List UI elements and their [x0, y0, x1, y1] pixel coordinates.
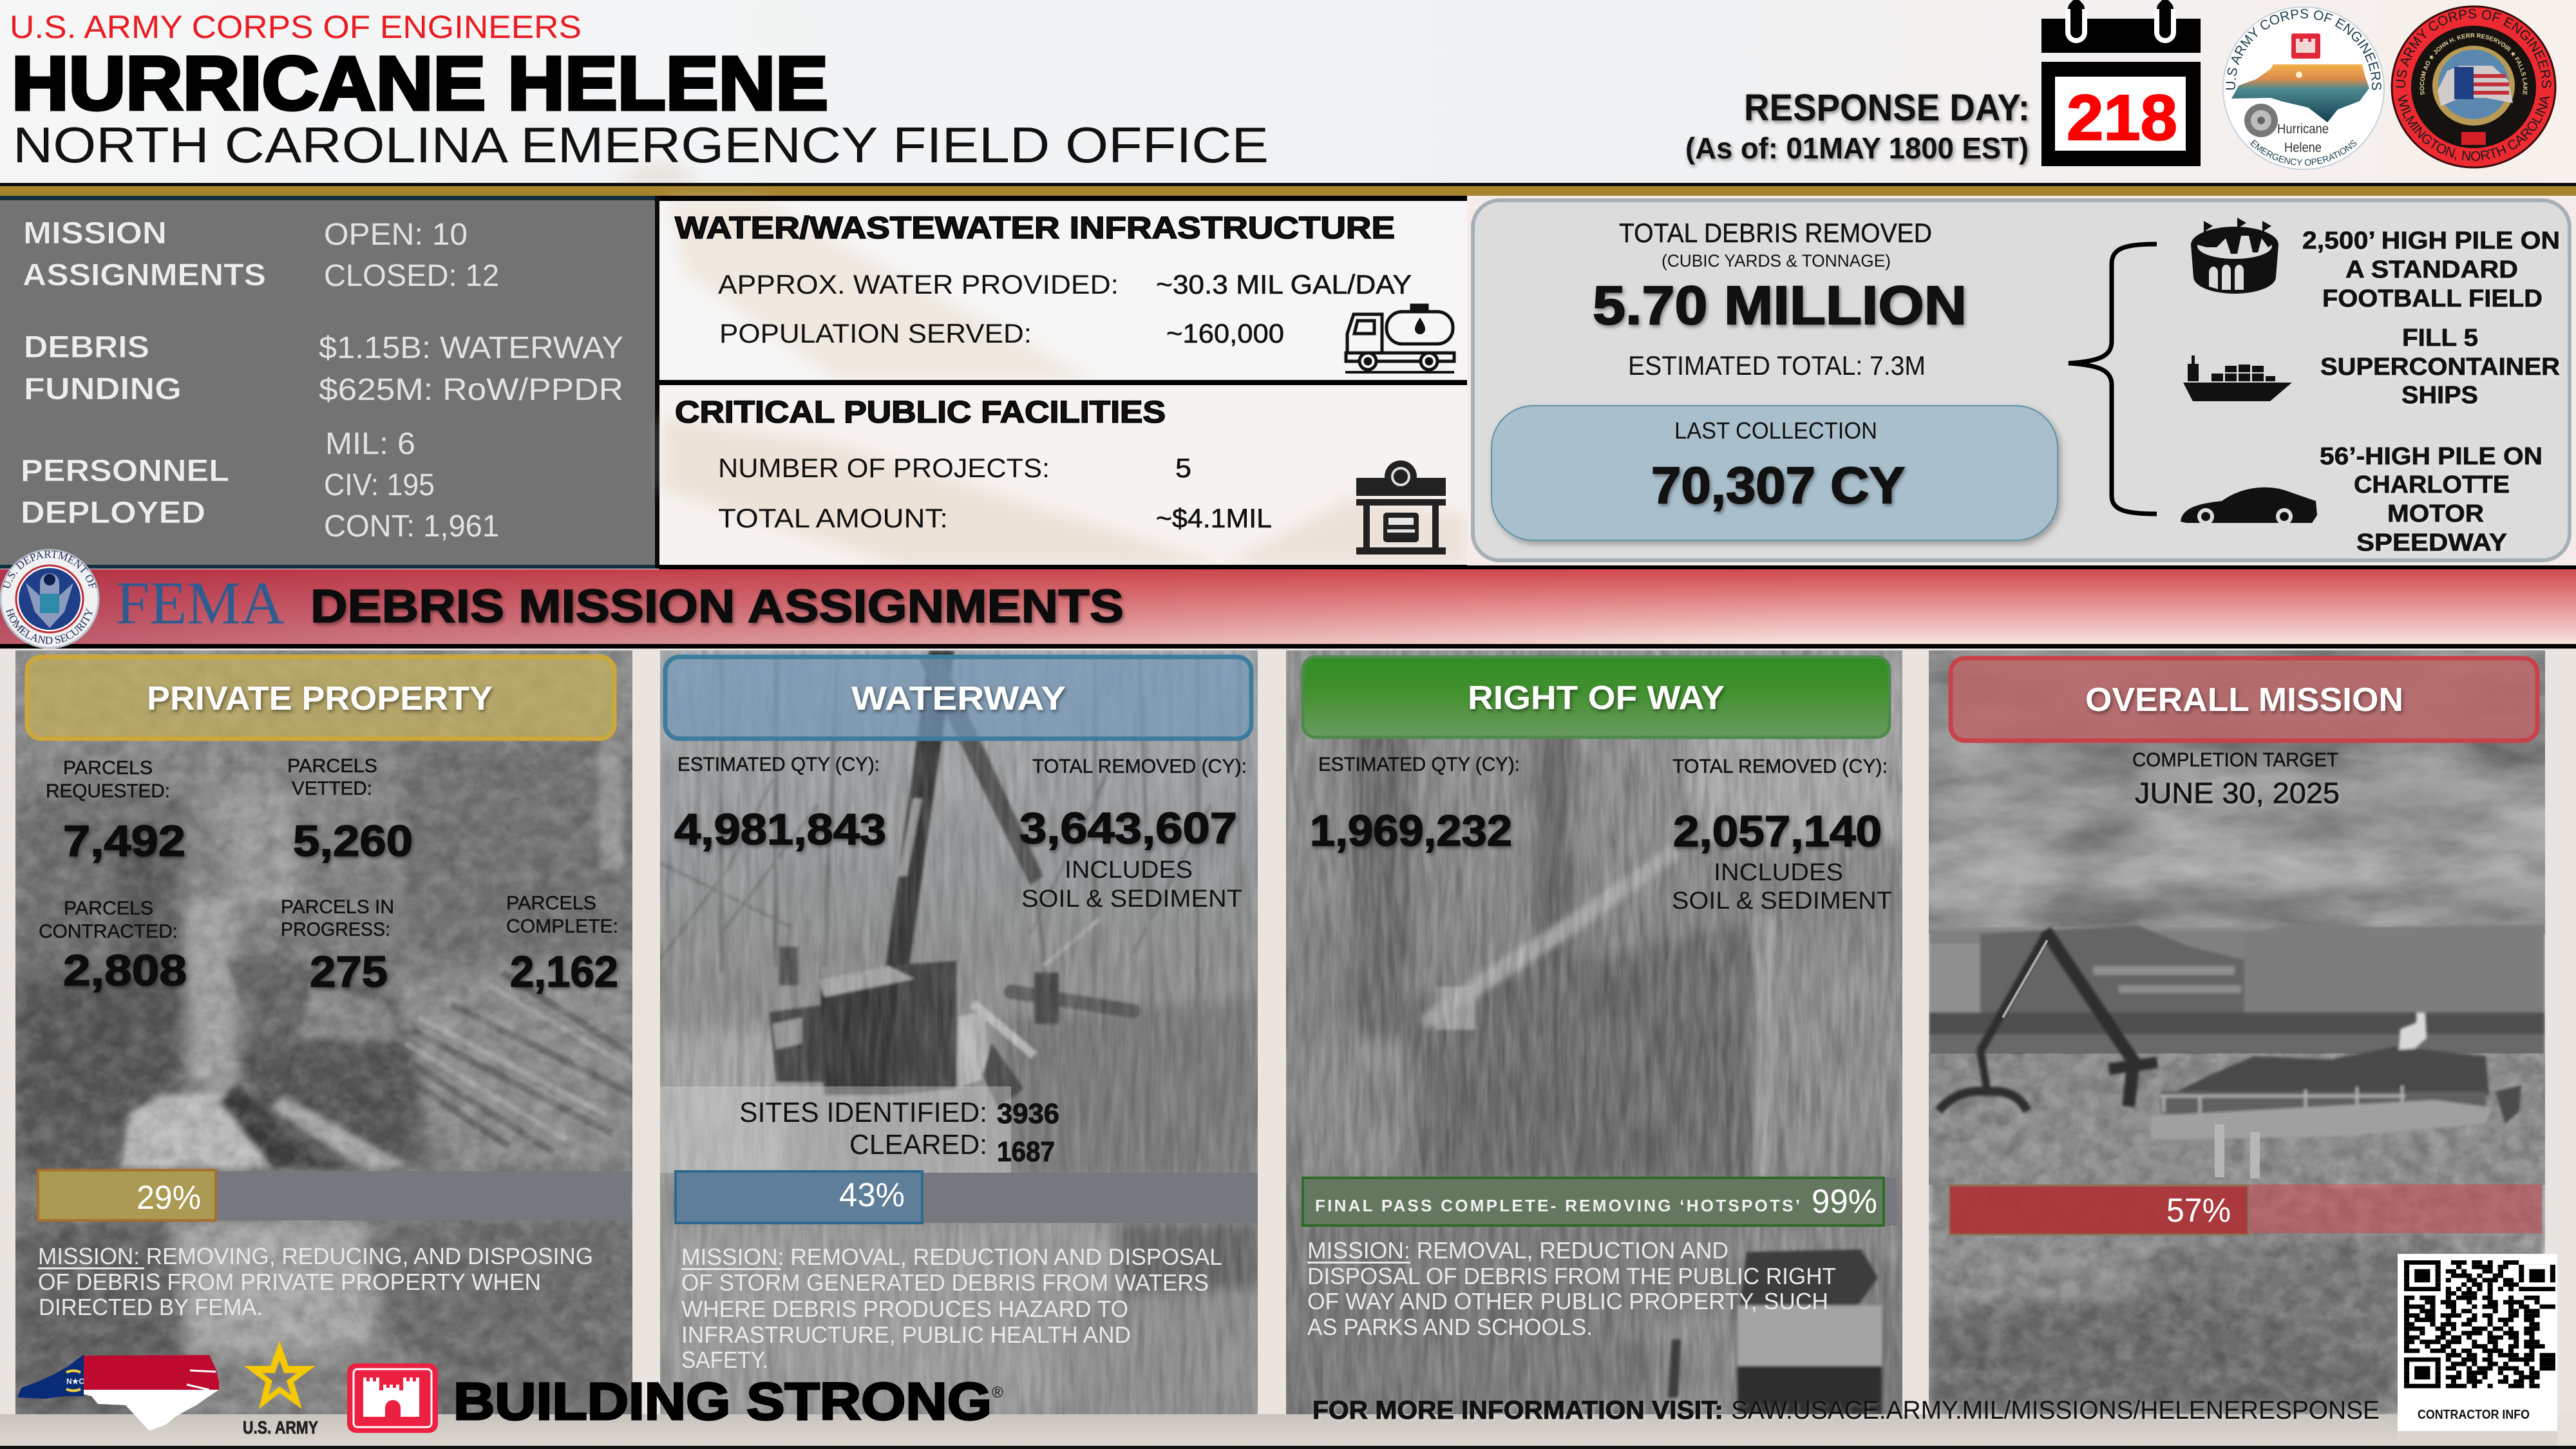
- panel: water and wastewater infrastructure: [659, 196, 1472, 385]
- mission description: OF DEBRIS FROM PRIVATE PROPERTY WHEN: [38, 1269, 541, 1295]
- seal: wilmington district: SOCOM AO ★ JOHN H. KERR RESERVOIR ★ FALLS LAKE: [2420, 33, 2528, 95]
- photo: excavator in forest: [660, 650, 1258, 1414]
- quantity statistics: SOIL & SEDIMENT: [1021, 886, 1242, 913]
- mission description: [681, 1244, 1222, 1373]
- quantity statistics: ESTIMATED QTY (CY):: [1318, 753, 1520, 775]
- seal: wilmington district: WILMINGTON, NORTH CAROLINA: [2394, 93, 2553, 164]
- seal: hurricane helene emergency operations: Helene: [2284, 140, 2322, 155]
- debris total text: TOTAL DEBRIS REMOVED: [1619, 218, 1932, 248]
- parcel statistics: PARCELS: [64, 898, 153, 919]
- panel: total debris removed: [1467, 196, 2576, 565]
- comparison captions: [2302, 227, 2560, 556]
- bracket: [2069, 244, 2157, 514]
- far bank and trees: [1929, 924, 2545, 1056]
- debris funding: $625M: RoW/PPDR: [319, 373, 623, 407]
- quantity statistics: 2,057,140: [1673, 807, 1882, 856]
- comparison captions: A STANDARD: [2345, 256, 2518, 283]
- parcel statistics: 2,808: [63, 946, 187, 995]
- last collection callout: [1492, 406, 2058, 540]
- subtitle: NORTH CAROLINA EMERGENCY FIELD OFFICE: [13, 117, 1269, 173]
- site counts: [739, 1097, 1059, 1168]
- panel title button: WATERWAY: [851, 680, 1066, 717]
- mission assignments: CLOSED: 12: [324, 259, 499, 293]
- icon: calendar with day count: [2041, 5, 2201, 166]
- panel: critical public facilities: TOTAL AMOUNT:: [718, 503, 948, 533]
- building strong slogan: BUILDING STRONG: [453, 1372, 992, 1431]
- mission description: OF WAY AND OTHER PUBLIC PROPERTY, SUCH: [1307, 1288, 1828, 1314]
- building strong slogan: ®: [992, 1384, 1003, 1401]
- heading: CRITICAL PUBLIC FACILITIES: [675, 395, 1166, 430]
- panel: water and wastewater infrastructure: POPULATION SERVED:: [719, 318, 1032, 348]
- debris funding: [24, 330, 623, 407]
- mission description: DIRECTED BY FEMA.: [39, 1294, 263, 1320]
- personnel deployed: PERSONNEL: [21, 454, 229, 488]
- panel title button: [1303, 657, 1889, 737]
- mission description: INFRASTRUCTURE, PUBLIC HEALTH AND: [681, 1321, 1131, 1348]
- progress bar 29%: [37, 1170, 631, 1220]
- panel: critical public facilities: ~$4.1MIL: [1156, 503, 1272, 533]
- comparison captions: SPEEDWAY: [2356, 529, 2507, 556]
- progress bar 43%: [676, 1171, 1258, 1223]
- panel: critical public facilities: NUMBER OF PROJECTS:: [718, 453, 1050, 483]
- mission description: MISSION: REMOVAL, REDUCTION AND: [1307, 1237, 1728, 1264]
- parcel statistics: PARCELS: [506, 893, 596, 914]
- quantity statistics: ESTIMATED QTY (CY):: [677, 753, 880, 775]
- excavator arm and grapple: [1938, 931, 2157, 1111]
- mission assignments: ASSIGNMENTS: [23, 258, 266, 292]
- debris total text: ESTIMATED TOTAL: 7.3M: [1628, 350, 1926, 381]
- parcel statistics: CONTRACTED:: [39, 921, 178, 942]
- more information link: SAW.USACE.ARMY.MIL/MISSIONS/HELENERESPONSE: [1731, 1396, 2380, 1425]
- response day label: RESPONSE DAY:: [1744, 87, 2030, 129]
- quantity statistics: INCLUDES: [1065, 857, 1193, 884]
- mission description: SAFETY.: [681, 1347, 768, 1373]
- quantity statistics: [1310, 753, 1892, 914]
- debris total text: 5.70 MILLION: [1593, 275, 1967, 336]
- quantity statistics: 3,643,607: [1019, 804, 1237, 853]
- foreground bank: [1929, 1111, 2545, 1414]
- panel title button: [665, 657, 1251, 739]
- personnel deployed: DEPLOYED: [21, 496, 205, 530]
- quantity statistics: SOIL & SEDIMENT: [1672, 887, 1892, 914]
- panel: water and wastewater infrastructure: APPROX. WATER PROVIDED:: [718, 269, 1119, 299]
- mission description: MISSION: REMOVING, REDUCING, AND DISPOSING: [38, 1243, 593, 1269]
- progress bar 57%: 57%: [2166, 1192, 2231, 1229]
- parcel statistics: PARCELS: [287, 755, 377, 777]
- parcel statistics: [39, 755, 618, 996]
- icon: water tanker truck: [1345, 305, 1454, 372]
- icon: North Carolina flag map: N★C: [66, 1377, 84, 1386]
- progress bar 43%: 43%: [839, 1177, 905, 1214]
- seal: hurricane helene emergency operations: [2223, 6, 2384, 169]
- QR code: contractor info: CONTRACTOR INFO: [2418, 1408, 2530, 1422]
- mission assignments: OPEN: 10: [324, 218, 468, 252]
- light panel behind site counts: [660, 1086, 1011, 1173]
- mission description: [38, 1243, 593, 1320]
- FEMA wordmark: FEMA: [116, 570, 285, 637]
- debris funding: $1.15B: WATERWAY: [319, 331, 623, 365]
- panel: right of way: [1286, 650, 1902, 1414]
- section banner: FEMA debris mission assignments: [0, 569, 2576, 649]
- parcel statistics: 5,260: [293, 817, 413, 866]
- debris funding: DEBRIS: [24, 330, 149, 365]
- quantity statistics: INCLUDES: [1714, 859, 1843, 886]
- site counts: 1687: [997, 1136, 1055, 1168]
- mission assignments: [23, 216, 499, 293]
- panel: waterway: [660, 650, 1258, 1414]
- mission assignments: MISSION: [23, 216, 167, 251]
- seal: hurricane helene emergency operations: U.S ARMY CORPS OF ENGINEERS: [2226, 9, 2382, 90]
- debris total text: [1593, 218, 1967, 381]
- truck in lower photo: [1668, 1249, 1882, 1414]
- panel: critical public facilities: [659, 385, 2576, 569]
- title block: [10, 9, 1269, 173]
- icon: North Carolina flag map: [17, 1354, 219, 1431]
- parcel statistics: 2,162: [510, 947, 618, 996]
- panel title button: [1951, 658, 2537, 741]
- comparison captions: FILL 5: [2402, 325, 2478, 352]
- mission description: [1307, 1237, 1836, 1340]
- banner heading: DEBRIS MISSION ASSIGNMENTS: [310, 581, 1124, 632]
- panel: critical public facilities: 5: [1175, 453, 1191, 483]
- response day label: [1685, 87, 2030, 165]
- mission description: AS PARKS AND SCHOOLS.: [1307, 1314, 1593, 1340]
- completion target: JUNE 30, 2025: [2135, 777, 2340, 810]
- heading: WATER/WASTEWATER INFRASTRUCTURE: [675, 211, 1395, 245]
- icon: stadium: [2191, 218, 2278, 294]
- panel: private property: [15, 650, 634, 1414]
- mission description: DISPOSAL OF DEBRIS FROM THE PUBLIC RIGHT: [1307, 1263, 1836, 1289]
- parcel statistics: PROGRESS:: [281, 919, 390, 940]
- quantity statistics: TOTAL REMOVED (CY):: [1032, 755, 1247, 777]
- panel title button: RIGHT OF WAY: [1468, 679, 1725, 717]
- site counts: SITES IDENTIFIED:: [739, 1097, 987, 1128]
- comparison captions: 2,500’ HIGH PILE ON: [2302, 227, 2560, 254]
- personnel deployed: MIL: 6: [325, 427, 415, 461]
- comparison captions: FOOTBALL FIELD: [2322, 285, 2543, 312]
- comparison captions: MOTOR: [2387, 500, 2484, 527]
- panel title button: [27, 657, 614, 739]
- main title: HURRICANE HELENE: [12, 41, 828, 126]
- personnel deployed: [21, 427, 499, 544]
- mission description: MISSION: REMOVAL, REDUCTION AND DISPOSAL: [681, 1244, 1222, 1270]
- icon: race car: [2181, 488, 2317, 525]
- seal: wilmington district: US ARMY CORPS OF ENGINEERS: [2394, 6, 2553, 89]
- parcel statistics: VETTED:: [292, 778, 372, 799]
- panel: water and wastewater infrastructure: ~160,000: [1166, 318, 1284, 348]
- completion target: [2132, 748, 2340, 810]
- debris total text: (CUBIC YARDS & TONNAGE): [1662, 251, 1891, 270]
- footer background strip and base line: [0, 1414, 2576, 1449]
- quantity statistics: TOTAL REMOVED (CY):: [1672, 755, 1888, 777]
- parcel statistics: 275: [310, 947, 388, 996]
- site counts: 3936: [997, 1098, 1059, 1130]
- progress bar 29%: 29%: [137, 1179, 201, 1217]
- completion target: COMPLETION TARGET: [2132, 748, 2338, 771]
- parcel statistics: 7,492: [63, 817, 185, 866]
- seal: hurricane helene emergency operations: EMERGENCY OPERATIONS: [2250, 139, 2357, 166]
- icon: Corps of Engineers castle: [347, 1363, 438, 1433]
- last collection callout: LAST COLLECTION: [1674, 417, 1877, 444]
- comparison captions: CHARLOTTE: [2354, 471, 2510, 498]
- panel title button: OVERALL MISSION: [2085, 681, 2403, 719]
- quantity statistics: [674, 753, 1247, 913]
- parcel statistics: PARCELS: [63, 757, 153, 779]
- panel: mission summary: [0, 196, 659, 569]
- comparison captions: 56’-HIGH PILE ON: [2320, 443, 2543, 470]
- barge and debris: [2151, 1012, 2521, 1140]
- panel: overall mission: [1929, 650, 2557, 1431]
- debris funding: FUNDING: [24, 372, 182, 406]
- progress bar 99%: 99%: [1812, 1183, 1877, 1220]
- icon: calendar with day count: 218: [2067, 82, 2177, 154]
- photo: debris pile and machinery: [15, 650, 634, 1414]
- header band: [0, 0, 2576, 196]
- progress bar 99%: FINAL PASS COMPLETE- REMOVING ‘HOTSPOTS’: [1315, 1196, 1800, 1215]
- last collection callout: 70,307 CY: [1651, 457, 1905, 514]
- icon: fire station: [1356, 460, 1446, 554]
- mission description: OF STORM GENERATED DEBRIS FROM WATERS: [681, 1269, 1209, 1296]
- personnel deployed: CIV: 195: [324, 468, 435, 502]
- icon: U.S. Army star: U.S. ARMY: [243, 1417, 318, 1437]
- progress bar 57%: [1949, 1184, 2542, 1235]
- parcel statistics: COMPLETE:: [506, 916, 618, 937]
- more information link: [1312, 1396, 2380, 1425]
- photo: debris barge on river: [1929, 650, 2545, 1414]
- response day label: (As of: 01MAY 1800 EST): [1685, 131, 2029, 165]
- seal: wilmington district: [2392, 6, 2555, 167]
- photo: roadside trees and truck: [1286, 650, 1902, 1414]
- panel title button: PRIVATE PROPERTY: [147, 680, 493, 717]
- more information link: FOR MORE INFORMATION VISIT:: [1312, 1396, 1723, 1425]
- seal: hurricane helene emergency operations: Hurricane: [2277, 122, 2329, 137]
- icon: U.S. Army star: [243, 1341, 318, 1437]
- personnel deployed: CONT: 1,961: [324, 509, 499, 544]
- comparison captions: SUPERCONTAINER: [2320, 354, 2560, 381]
- panel: water and wastewater infrastructure: ~30.3 MIL GAL/DAY: [1156, 269, 1412, 299]
- QR code: contractor info: [2398, 1254, 2557, 1431]
- quantity statistics: 1,969,232: [1310, 806, 1512, 855]
- seal: homeland security: U.S. DEPARTMENT OF: [0, 548, 99, 591]
- mission description: WHERE DEBRIS PRODUCES HAZARD TO: [681, 1296, 1128, 1322]
- quantity statistics: 4,981,843: [674, 805, 886, 854]
- icon: container ship: [2183, 355, 2292, 401]
- parcel statistics: PARCELS IN: [281, 896, 394, 918]
- agency name: U.S. ARMY CORPS OF ENGINEERS: [10, 9, 582, 45]
- seal: homeland security: HOMELAND SECURITY: [3, 607, 96, 647]
- site counts: CLEARED:: [849, 1129, 987, 1160]
- parcel statistics: REQUESTED:: [46, 781, 170, 802]
- seal: homeland security: [0, 548, 99, 648]
- river: [1929, 1054, 2545, 1185]
- comparison captions: SHIPS: [2401, 382, 2478, 409]
- progress bar 99%: [1303, 1178, 1897, 1226]
